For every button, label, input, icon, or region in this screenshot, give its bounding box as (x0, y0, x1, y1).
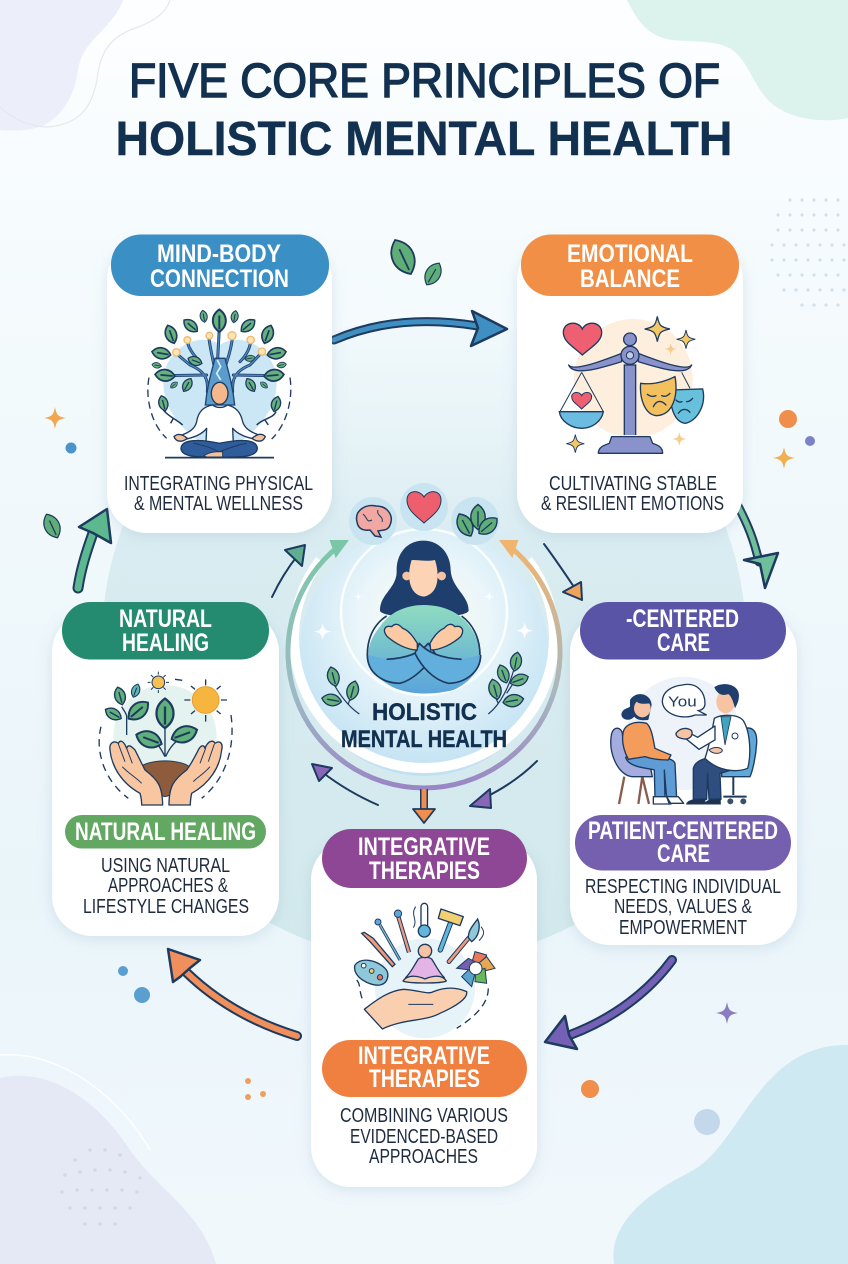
heading pill (111, 234, 329, 296)
hub label: HOLISTIC (372, 699, 477, 726)
description: COMBINING VARIOUS (340, 1105, 508, 1127)
patient chair (611, 728, 652, 804)
icon: patient talking with doctor: You (668, 695, 697, 711)
description: & RESILIENT EMOTIONS (541, 493, 724, 515)
secondary heading pill: INTEGRATIVE (358, 1042, 490, 1070)
secondary heading pill (65, 815, 266, 848)
description (585, 876, 781, 939)
hub ring (288, 528, 560, 823)
title: FIVE CORE PRINCIPLES OF (129, 55, 720, 108)
description: APPROACHES (369, 1146, 478, 1168)
icon: hands holding a seedling with sun (99, 672, 232, 805)
description (124, 473, 313, 515)
hub label: MENTAL HEALTH (341, 726, 507, 753)
secondary heading pill (575, 815, 791, 870)
heading pill: NATURAL (119, 605, 212, 633)
icon: balance scale with heart and masks (559, 316, 704, 453)
description (83, 855, 249, 918)
description: EMPOWERMENT (619, 917, 747, 939)
hub label (341, 699, 507, 753)
heading pill: MIND-BODY (157, 240, 281, 268)
heading pill: BALANCE (580, 265, 680, 293)
central hub: holistic mental health (288, 483, 560, 823)
secondary heading pill (322, 1040, 527, 1097)
description: RESPECTING INDIVIDUAL (585, 876, 781, 898)
panel: emotional balance (517, 234, 743, 533)
description (541, 473, 724, 515)
description: & MENTAL WELLNESS (134, 493, 303, 515)
description (340, 1105, 508, 1168)
panel: integrative therapies (311, 829, 537, 1187)
arrow: mind-body to emotional balance (334, 311, 507, 346)
heading pill (521, 234, 739, 296)
heading pill: -CENTERED (626, 605, 739, 633)
arrow: patient care to integrative therapies (545, 960, 672, 1049)
heading pill (62, 602, 269, 660)
icon: patient talking with doctor (611, 677, 757, 804)
description: CULTIVATING STABLE (549, 473, 717, 495)
panel: patient-centered care (570, 602, 797, 945)
heading pill (580, 602, 786, 660)
heading pill: INTEGRATIVE (358, 833, 490, 861)
description: USING NATURAL (101, 855, 230, 877)
hub figure: self-hug person (314, 541, 533, 714)
hub icon: leaves (451, 497, 501, 545)
heading pill: EMOTIONAL (567, 240, 693, 268)
panel: mind-body connection (107, 234, 332, 533)
title: HOLISTIC MENTAL HEALTH (116, 113, 732, 166)
icon: hand holding therapy tools (355, 903, 495, 1038)
heading pill: HEALING (122, 629, 209, 657)
icon: meditating person under tree (148, 309, 291, 458)
secondary heading pill: CARE (657, 840, 710, 868)
arrow: natural healing to mind-body (78, 509, 111, 588)
description: NEEDS, VALUES & (614, 896, 753, 918)
panel: natural healing (52, 602, 279, 936)
heading pill: CARE (657, 629, 710, 657)
arrow: emotional balance to patient care (738, 506, 778, 588)
description: INTEGRATING PHYSICAL (124, 473, 313, 495)
secondary heading pill: PATIENT-CENTERED (588, 817, 778, 845)
secondary heading pill: NATURAL HEALING (75, 818, 256, 846)
title (116, 55, 732, 166)
description: APPROACHES & (108, 875, 228, 897)
small inner arrows (272, 544, 582, 808)
description: EVIDENCED-BASED (350, 1126, 498, 1148)
hub icon: brain (349, 497, 397, 545)
hub icon: heart (400, 483, 448, 531)
description: LIFESTYLE CHANGES (83, 896, 249, 918)
secondary heading pill: THERAPIES (369, 1065, 480, 1093)
heading pill: THERAPIES (369, 857, 480, 885)
heading pill (322, 829, 527, 888)
heading pill: CONNECTION (150, 265, 289, 293)
decorative leaves and sparkles (40, 235, 815, 1135)
arrow: integrative therapies to natural healing (168, 949, 297, 1036)
